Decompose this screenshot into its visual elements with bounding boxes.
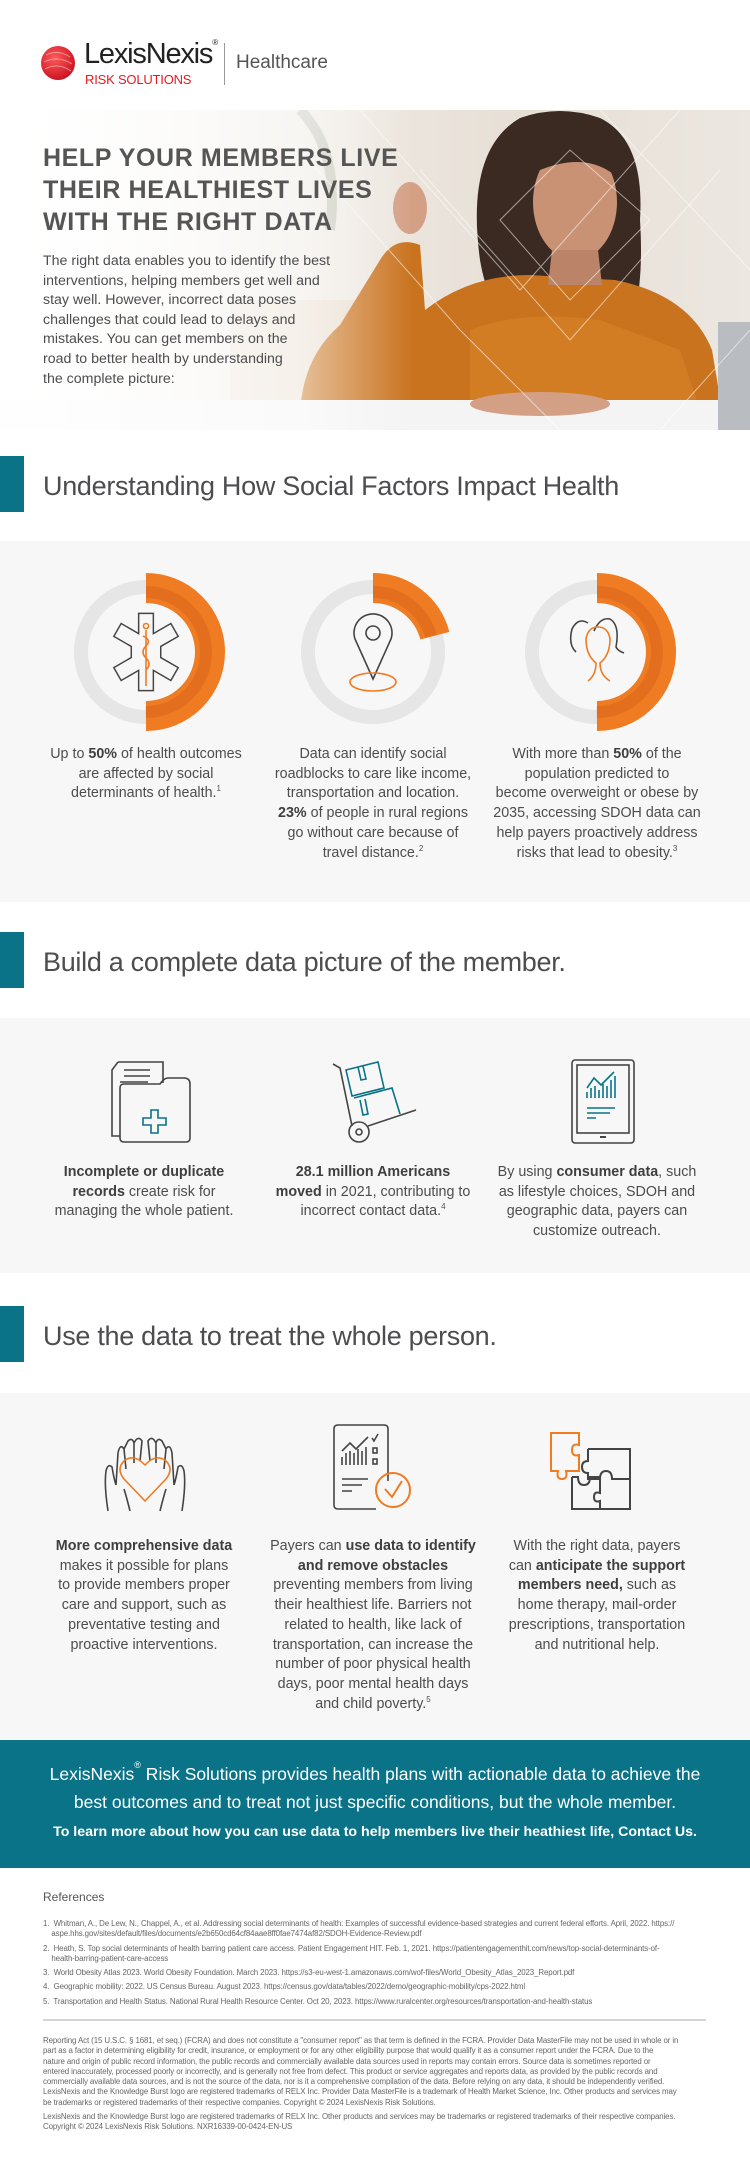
text 2: transportation and location. xyxy=(287,785,459,801)
text 2: 23% of people in rural regions xyxy=(278,805,468,821)
text 2: roadblocks to care like income, xyxy=(275,766,471,782)
text: anticipate: prescriptions, transportation xyxy=(509,1617,685,1633)
cta contact line: To learn more about how you can use data to help members live their heathiest life, Contact Us. xyxy=(53,1824,697,1840)
text: records xyxy=(55,1164,233,1219)
text 3: help payers proactively address xyxy=(496,825,698,841)
teal call to action band xyxy=(0,1740,750,1868)
text: anticipate: members need, such as xyxy=(518,1577,676,1593)
text: obstacles: days, poor mental health days xyxy=(278,1676,468,1692)
text: obstacles: preventing members from living xyxy=(273,1577,473,1593)
hero paragraph: interventions, helping members get well and xyxy=(43,273,320,289)
text: consumer data xyxy=(498,1164,696,1239)
text: comprehensive data: to provide members proper xyxy=(58,1577,230,1593)
disclaimer: LexisNexis and the Knowledge Burst logo are registered trademarks of RELX Inc. Other products and services may be trademarks or registered trademarks of their respective companies. xyxy=(43,2112,675,2121)
text 3: risks that lead to obesity.3 xyxy=(517,844,677,861)
hero paragraph xyxy=(43,253,330,387)
hand raised xyxy=(393,182,427,234)
text 3: population predicted to xyxy=(525,766,669,782)
text 2: go without care because of xyxy=(288,825,458,841)
text: records: Incomplete or duplicate xyxy=(64,1164,224,1180)
references: References xyxy=(43,1890,104,1904)
icon: report with check xyxy=(333,1424,411,1510)
hero headline xyxy=(43,144,398,236)
panel: social factors xyxy=(0,541,750,902)
text 1: are affected by social xyxy=(79,766,213,782)
text 3: become overweight or obese by xyxy=(496,785,698,801)
disclaimer: LexisNexis and the Knowledge Burst logo are registered trademarks of RELX Inc. Provider Data MasterFile is a trademark of Health Market Science, Inc. Other products and services may xyxy=(43,2087,677,2096)
section 3 heading: Use the data to treat the whole person. xyxy=(43,1321,497,1351)
references: aspe.hhs.gov/sites/default/files/documents/e2b650cd64cf84aae8ff0fae7474af82/SDOH-Evidence-Review.pdf xyxy=(51,1929,422,1938)
text: anticipate: With the right data, payers xyxy=(514,1538,680,1554)
hero paragraph: road to better health by understanding xyxy=(43,351,283,367)
text: obstacles: number of poor physical health xyxy=(275,1656,471,1672)
disclaimer: nature and origin of public record information, the public records and commercially available data sources used in reports may contain errors. Source data is sometimes reported or xyxy=(43,2057,651,2066)
cta statement xyxy=(50,1760,700,1812)
hero paragraph: mistakes. You can get members on the xyxy=(43,331,287,347)
text: comprehensive data: preventative testing and xyxy=(68,1617,220,1633)
donut 1: 50% xyxy=(74,573,225,731)
text: comprehensive data: proactive interventions. xyxy=(70,1637,218,1653)
text 3: With more than 50% of the xyxy=(512,746,682,762)
references: health-barring-patient-care-access xyxy=(51,1954,168,1963)
hero paragraph: the complete picture: xyxy=(43,371,175,387)
text: comprehensive data xyxy=(56,1538,232,1653)
text: obstacles: related to health, like lack of xyxy=(284,1617,462,1633)
text: obstacles: transportation, can increase the xyxy=(273,1637,473,1653)
face xyxy=(533,144,617,260)
disclaimer: entered inaccurately, processed poorly or incorrectly, and is generally not free from defect. This product or service aggregates and reports data, as provided by the public records and xyxy=(43,2067,658,2076)
hero paragraph: challenges that could lead to delays and xyxy=(43,312,295,328)
disclaimer: commercially available data sources, and is not the source of the data, nor is it a comprehensive compilation of the data. Before relying on any data, it should be independently verified. xyxy=(43,2077,664,2086)
text: movers: moved in 2021, contributing to xyxy=(276,1184,470,1200)
text: movers: 28.1 million Americans xyxy=(296,1164,450,1180)
icon: star of life xyxy=(114,613,178,691)
text 1: determinants of health.1 xyxy=(71,784,221,801)
icon: tablet xyxy=(571,1059,635,1144)
disclaimer: part as a factor in determining eligibility for credit, insurance, or employment or for any other eligibility purpose that would qualify it as a consumer report under the FCRA. Due to the xyxy=(43,2046,653,2055)
text: consumer data: geographic data, payers can xyxy=(507,1203,687,1219)
references: 5. Transportation and Health Status. National Rural Health Resource Center. Oct 20, 2023. https://www.ruralcenter.org/resources/transportation-and-health-status xyxy=(43,1997,592,2006)
icon: hands with heart xyxy=(104,1438,186,1512)
text 1: Up to 50% of health outcomes xyxy=(50,746,242,762)
text 1 xyxy=(50,746,242,801)
hair back xyxy=(477,111,641,340)
text 2: travel distance.2 xyxy=(323,844,423,861)
text: comprehensive data: makes it possible for plans xyxy=(60,1558,228,1574)
header logo: RISK SOLUTIONS xyxy=(85,72,191,87)
hero headline: HELP YOUR MEMBERS LIVE xyxy=(43,144,398,172)
text: consumer data: customize outreach. xyxy=(533,1223,661,1239)
text: comprehensive data: care and support, such as xyxy=(62,1597,226,1613)
section 1 heading xyxy=(0,456,619,512)
icon: people xyxy=(571,619,624,681)
references: 2. Heath, S. Top social determinants of health barring patient care access. Patient Engagement HIT. Feb. 1, 2021. https://patientengagementhit.com/news/top-social-determinants-of- xyxy=(43,1944,660,1953)
text: obstacles: and child poverty.5 xyxy=(315,1695,431,1712)
disclaimer xyxy=(43,2036,678,2131)
hero paragraph: stay well. However, incorrect data poses xyxy=(43,292,296,308)
disclaimer: Reporting Act (15 U.S.C. § 1681, et seq.) (FCRA) and does not constitute a "consumer report" as that term is defined in the FCRA. Provider Data MasterFile may not be used in whole or in xyxy=(43,2036,678,2045)
laptop xyxy=(718,322,750,430)
references xyxy=(43,1890,674,2006)
cta statement: best outcomes and to treat not just specific conditions, but the whole member. xyxy=(74,1792,676,1812)
disclaimer: Copyright © 2024 LexisNexis Risk Solutions. NXR16339-00-0424-EN-US xyxy=(43,2122,292,2131)
panel: data picture xyxy=(0,1018,750,1273)
icon: records folder xyxy=(111,1061,191,1143)
header logo: Healthcare xyxy=(236,52,328,73)
text 2: Data can identify social xyxy=(299,746,447,762)
text: obstacles xyxy=(270,1538,476,1712)
icon: logo globe xyxy=(41,46,75,80)
hero paragraph: The right data enables you to identify the best xyxy=(43,253,330,269)
text 3 xyxy=(493,746,701,861)
donut 3: 50% xyxy=(525,573,676,731)
text 3: 2035, accessing SDOH data can xyxy=(493,805,701,821)
text: anticipate: and nutritional help. xyxy=(535,1637,659,1653)
section 2 heading: Build a complete data picture of the member. xyxy=(43,947,566,977)
text: records: records create risk for xyxy=(72,1184,216,1200)
text: movers: incorrect contact data.4 xyxy=(300,1202,446,1219)
icon: map pin xyxy=(350,614,396,691)
text: anticipate: home therapy, mail-order xyxy=(518,1597,676,1613)
section 1 heading: Understanding How Social Factors Impact Health xyxy=(43,471,619,501)
sweater xyxy=(300,242,722,430)
hero image xyxy=(230,110,750,430)
text: consumer data: By using consumer data, such xyxy=(498,1164,696,1180)
section 2 heading xyxy=(0,932,566,988)
text: obstacles: and remove obstacles xyxy=(298,1558,448,1574)
references: 4. Geographic mobility: 2022. US Census Bureau. August 2023. https://census.gov/data/tables/2022/demo/geographic-mobility/cps-2022.html xyxy=(43,1982,525,1991)
section 3 heading xyxy=(0,1306,497,1362)
icon: puzzle xyxy=(550,1432,631,1510)
hero headline: WITH THE RIGHT DATA xyxy=(43,208,333,236)
hero headline: THEIR HEALTHIEST LIVES xyxy=(43,176,372,204)
header logo xyxy=(41,38,328,87)
text: anticipate xyxy=(509,1538,685,1653)
donut 2: 23% xyxy=(301,573,450,724)
text: movers xyxy=(276,1164,470,1219)
text: obstacles: Payers can use data to identify xyxy=(270,1538,476,1554)
cta statement: LexisNexis® Risk Solutions provides health plans with actionable data to achieve the xyxy=(50,1760,700,1784)
text: obstacles: their healthiest life. Barriers not xyxy=(274,1597,472,1613)
text: records: managing the whole patient. xyxy=(55,1203,233,1219)
text: comprehensive data: More comprehensive data xyxy=(56,1538,232,1554)
references: 1. Whitman, A., De Lew, N., Chappel, A., et al. Addressing social determinants of health: Examples of successful evidence-based strategies and current federal efforts. April, 2022. https:// xyxy=(43,1919,674,1928)
panel: whole person xyxy=(0,1393,750,1740)
text: consumer data: as lifestyle choices, SDOH and xyxy=(499,1184,695,1200)
disclaimer: be trademarks or registered trademarks of their respective companies. Copyright © 2024 LexisNexis Risk Solutions. xyxy=(43,2098,436,2107)
references: 3. World Obesity Atlas 2023. World Obesity Foundation. March 2023. https://s3-eu-west-1.amazonaws.com/wof-files/World_Obesity_Atlas_2023_Report.pdf xyxy=(43,1968,574,1977)
text: anticipate: can anticipate the support xyxy=(509,1558,685,1574)
text 2 xyxy=(275,746,471,861)
desk xyxy=(0,400,720,430)
logo wordmark: LexisNexis® xyxy=(84,38,217,70)
icon: hand truck xyxy=(332,1061,416,1143)
